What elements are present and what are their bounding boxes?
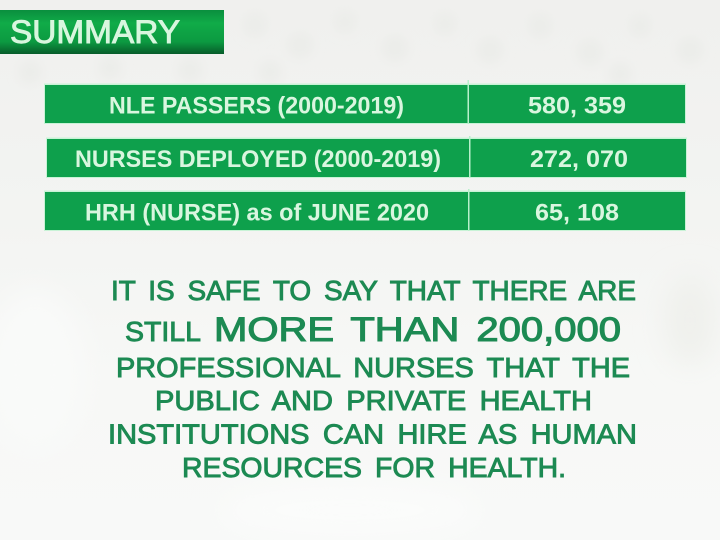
conclusion text block — [108, 275, 637, 483]
table row: NLE passers — [44, 80, 686, 124]
conclusion text block: INSTITUTIONS CAN HIRE AS HUMAN — [108, 418, 637, 450]
conclusion text block: RESOURCES FOR HEALTH. — [182, 452, 566, 483]
table row: nurses deployed: 272, 070 — [530, 146, 628, 173]
conclusion text block: PUBLIC AND PRIVATE HEALTH — [155, 385, 592, 416]
conclusion text block: STILL — [125, 316, 201, 347]
table row: nurses deployed — [46, 136, 687, 178]
title banner: SUMMARY: SUMMARY — [10, 14, 180, 50]
title banner: SUMMARY — [0, 10, 224, 54]
conclusion text block: PROFESSIONAL NURSES THAT THE — [116, 352, 630, 383]
table row: NLE passers: NLE PASSERS (2000-2019) — [109, 92, 404, 120]
table row: nurses deployed: NURSES DEPLOYED (2000-2019) — [75, 146, 441, 173]
table row: HRH nurse as of June 2020 — [44, 189, 686, 231]
table row: NLE passers: 580, 359 — [528, 92, 626, 120]
conclusion text block: MORE THAN 200,000 — [214, 311, 621, 349]
conclusion text block: IT IS SAFE TO SAY THAT THERE ARE — [111, 275, 636, 306]
table row: HRH nurse as of June 2020: 65, 108 — [535, 200, 619, 226]
table row: HRH nurse as of June 2020: HRH (NURSE) as of JUNE 2020 — [85, 200, 429, 226]
